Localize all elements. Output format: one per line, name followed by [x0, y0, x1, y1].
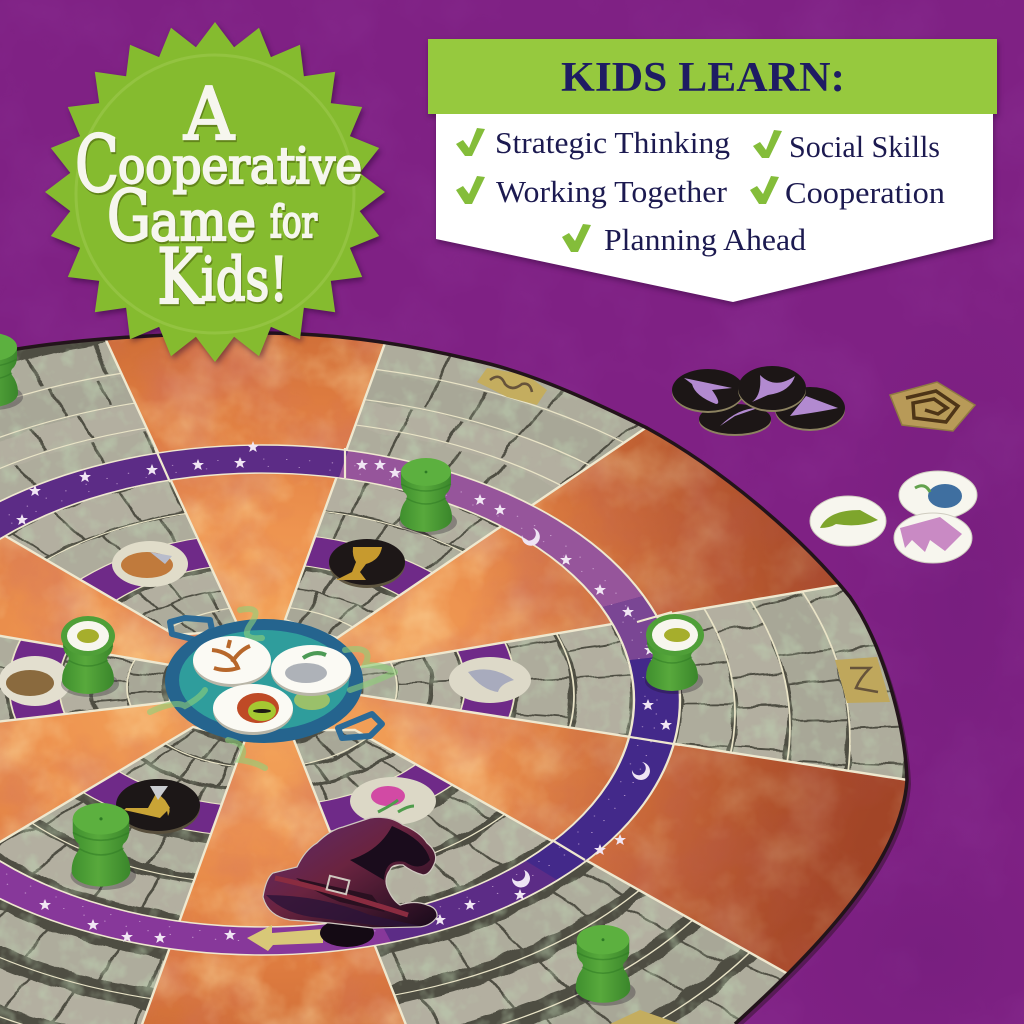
- token: magic lamp: [116, 779, 200, 834]
- green pawn top centre: [399, 458, 457, 535]
- badge text: for: [270, 197, 318, 248]
- badge text: G: [107, 175, 151, 257]
- badge text: K: [157, 232, 204, 321]
- Kids Learn panel: [428, 39, 997, 302]
- stone wedges: [0, 330, 920, 1024]
- lizard token: [810, 496, 886, 546]
- cauldron bowl: [165, 619, 363, 743]
- token: chalice: [329, 539, 405, 588]
- starry purple ring: [0, 441, 680, 955]
- moss flecks: [0, 330, 920, 1024]
- gold spiral corner markers: [477, 368, 890, 1024]
- badge text: C: [75, 120, 119, 210]
- token: pink rose: [350, 777, 436, 825]
- wedge spokes: [0, 330, 940, 1024]
- orange wedges: [0, 330, 920, 1024]
- badge text: [75, 72, 362, 321]
- green pawn bottom right: [575, 925, 636, 1006]
- game board: [0, 330, 940, 1024]
- skill: Planning Ahead: Planning Ahead: [604, 222, 807, 257]
- yellow arrow on ring: [247, 925, 323, 951]
- token: owl: [0, 656, 71, 706]
- green pawn at left edge: [0, 333, 23, 410]
- eye token: [213, 684, 293, 735]
- green header banner: [428, 39, 997, 114]
- green pawn left with eye token: [61, 616, 119, 697]
- beetle token: [899, 471, 977, 519]
- skill: Working Together: Working Together: [496, 174, 728, 209]
- starburst badge: [45, 22, 385, 362]
- steam wisps: [150, 609, 395, 768]
- purple token bands: [34, 548, 490, 822]
- heading: KIDS LEARN:: [561, 55, 845, 101]
- badge text: ame: [150, 190, 256, 253]
- rock token: [271, 645, 351, 696]
- green pawn right with turtle token: [645, 614, 704, 694]
- loose white ingredient tokens: [810, 471, 977, 563]
- skill: Social Skills: Social Skills: [789, 129, 940, 164]
- token: orange creature: [112, 541, 188, 587]
- badge text: ooperative: [118, 137, 362, 195]
- green pawn bottom left: [70, 803, 136, 890]
- bat wing token: [894, 513, 972, 563]
- central cauldron with ingredient tokens: [150, 609, 395, 768]
- board tokens: [0, 539, 531, 834]
- tree root token: [193, 636, 271, 687]
- badge text: A: [183, 72, 235, 156]
- loose black witch-hat tokens: [672, 366, 845, 436]
- token: grey unicorn: [449, 657, 531, 703]
- badge text: ids!: [201, 245, 288, 315]
- gold pentagon spiral tile: [890, 382, 975, 431]
- cauldron handles: [170, 618, 382, 738]
- white arrow-shaped panel body: [436, 110, 993, 302]
- witch hat pawn: [263, 817, 437, 947]
- skill: Strategic Thinking: Strategic Thinking: [495, 125, 730, 160]
- skill: Cooperation: Cooperation: [785, 175, 946, 210]
